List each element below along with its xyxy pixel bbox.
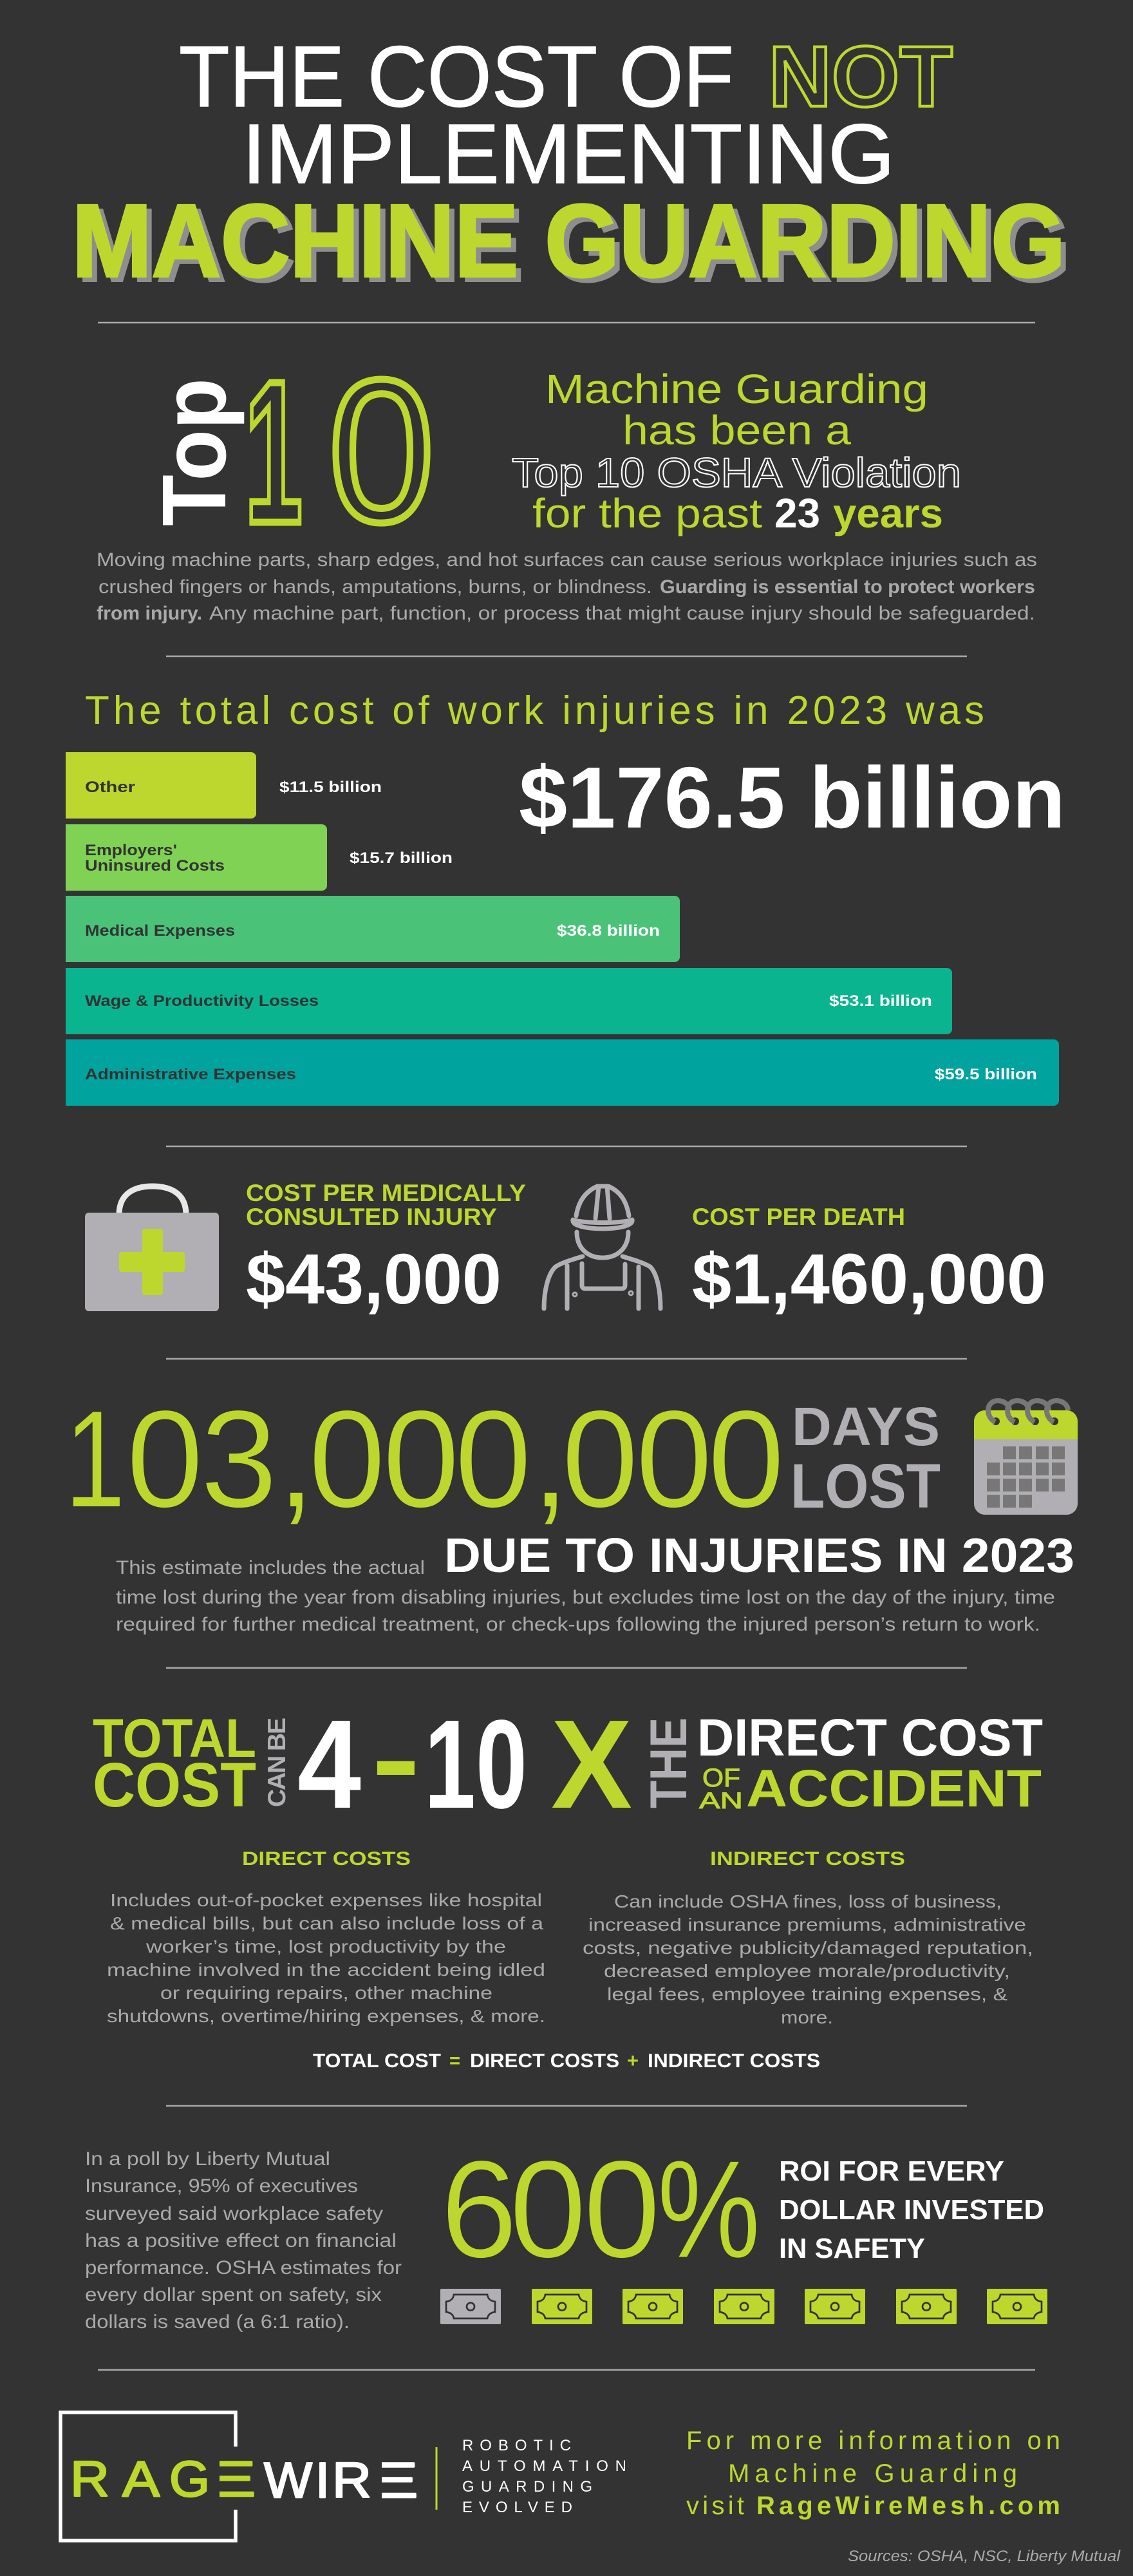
bar: medical expenses: Medical Expenses [85,922,235,940]
formula: total cost: + [627,2049,639,2072]
logo tagline: ROBOTIC [462,2437,571,2454]
headline: total cost multiplier: COST [93,1750,256,1820]
bar: employers uninsured costs: $15.7 billion [350,849,453,867]
bar chart: cost of injuries [66,752,1059,1106]
title: NOT [769,29,953,125]
bar: employers uninsured costs: Employers' [85,842,177,859]
logo tagline: AUTOMATION [462,2458,626,2475]
panel: direct costs: or requiring repairs, other machine [160,1983,492,2003]
stat: cost per medically consulted injury: COST PER MEDICALLY [246,1180,526,1206]
roi label: DOLLAR INVESTED [779,2194,1044,2226]
intro paragraph: crushed fingers or hands, amputations, burns, or blindness. [98,576,652,598]
call to action: Machine Guarding [728,2459,1017,2488]
days lost label: LOST [791,1451,941,1521]
stat: cost per death: $1,460,000 [692,1240,1046,1319]
bar: administrative expenses: $59.5 billion [935,1066,1037,1083]
panel: indirect costs [583,1848,1033,2027]
icon: medical kit [85,1186,219,1311]
panel: direct costs: Includes out-of-pocket expenses like hospital [110,1890,542,1910]
headline: total cost multiplier: TOTAL [93,1708,256,1768]
days lost label [791,1396,941,1521]
stat: cost per medically consulted injury [246,1180,526,1319]
call to action: visit [686,2492,744,2520]
poll paragraph: has a positive effect on financial [85,2230,397,2251]
top 10 graphic: 0 [328,337,435,564]
headline: total cost multiplier: OF [702,1764,740,1792]
panel: direct costs: & medical bills, but can also include loss of a [110,1913,544,1933]
poll paragraph: Insurance, 95% of executives [85,2175,358,2197]
due to injuries heading: DUE TO INJURIES IN 2023 [444,1528,1074,1582]
top 10 statement: 23 [774,490,820,536]
poll paragraph: every dollar spent on safety, six [85,2284,382,2306]
headline: total cost multiplier: - [371,1694,420,1823]
bar: other: Other [85,779,135,796]
icon: construction worker [544,1186,660,1309]
bar: administrative expenses: Administrative Expenses [85,1066,296,1083]
poll paragraph: surveyed said workplace safety [85,2203,383,2224]
days lost explanation: time lost during the year from disabling injuries, but excludes time lost on the day of the injury, time [116,1587,1055,1608]
intro paragraph: Any machine part, function, or process that might cause injury should be safeguarded. [209,603,1035,624]
panel: indirect costs: INDIRECT COSTS [710,1848,905,1870]
formula: total cost: INDIRECT COSTS [648,2049,820,2072]
call to action [686,2427,1060,2520]
headline: total cost multiplier [93,1694,1043,1835]
logo tagline: GUARDING [462,2478,592,2496]
headline: total cost multiplier: DIRECT COST [697,1709,1043,1767]
intro paragraph: from injury. [97,603,202,624]
logo: RageWire: E [205,2450,256,2507]
logo: RageWire: G [169,2450,210,2507]
top 10 statement: years [833,490,943,536]
top 10 statement: for the past [532,490,762,536]
days lost number: 1 [64,1381,126,1537]
panel: indirect costs: legal fees, employee training expenses, & [607,1984,1007,2004]
title: MACHINE GUARDING [77,187,1071,303]
roi label: ROI FOR EVERY [779,2155,1004,2187]
top 10 graphic: 1 [245,339,303,565]
days lost explanation [116,1557,1055,1635]
top 10 statement: has been a [623,407,851,453]
bar: employers uninsured costs [66,824,453,891]
bar: wage and productivity losses: $53.1 billion [829,992,932,1010]
panel: indirect costs: costs, negative publicity/damaged reputation, [583,1938,1033,1958]
headline: total cost multiplier: 4 [297,1694,361,1835]
panel: indirect costs: increased insurance premiums, administrative [588,1915,1026,1935]
bar: administrative expenses [66,1039,1059,1106]
headline: total cost multiplier: 10 [424,1694,527,1835]
top 10 statement: Machine Guarding [545,366,928,412]
title: THE COST OF [179,29,734,125]
headline: total cost multiplier: X [551,1694,632,1835]
sources: Sources: OSHA, NSC, Liberty Mutual [848,2548,1121,2565]
logo: RageWire: W [264,2452,312,2508]
roi label [779,2155,1044,2264]
stat: cost per medically consulted injury: $43,000 [246,1240,501,1319]
intro paragraph: Guarding is essential to protect workers [660,576,1035,598]
formula: total cost: = [449,2049,460,2072]
logo tagline [462,2437,626,2516]
top 10 graphic [143,337,435,565]
title: MACHINE GUARDING [72,183,1065,298]
logo: RageWire [61,2412,436,2541]
panel: direct costs: DIRECT COSTS [242,1848,411,1870]
call to action: RageWireMesh.com [756,2492,1060,2520]
headline: total cost multiplier: ACCIDENT [746,1759,1042,1818]
logo: RageWire: A [122,2450,160,2507]
panel: indirect costs: more. [781,2007,833,2027]
headline: total cost multiplier: CAN BE [263,1718,291,1807]
poll paragraph: In a poll by Liberty Mutual [85,2148,330,2170]
headline: total cost multiplier: THE [640,1718,698,1808]
bar: medical expenses [66,896,680,962]
roi figure: 600 [440,2131,660,2287]
total cost heading: The total cost of work injuries in 2023 was [85,688,984,733]
headline: total cost multiplier: AN [699,1788,743,1814]
panel: indirect costs: Can include OSHA fines, loss of business, [614,1891,1002,1911]
total cost figure: $176.5 billion [519,749,1065,846]
icons: dollar bills [440,2289,1047,2324]
icon: calendar [974,1401,1078,1515]
days lost explanation: This estimate includes the actual [116,1557,425,1578]
call to action: For more information on [686,2427,1060,2455]
bar: other [66,752,382,819]
bar: medical expenses: $36.8 billion [557,922,660,940]
title: IMPLEMENTING [242,106,895,201]
roi figure: % [657,2131,760,2287]
logo: RageWire: E [367,2452,418,2508]
top 10 statement [512,366,961,536]
title [72,29,1071,303]
roi figure [440,2131,760,2287]
bar: other: $11.5 billion [279,779,382,796]
bar: employers uninsured costs: Uninsured Costs [85,857,225,875]
stat: cost per death [692,1204,1046,1319]
bar: wage and productivity losses [66,968,952,1034]
intro paragraph [97,549,1037,624]
panel: direct costs: machine involved in the accident being idled [107,1960,545,1980]
stat: cost per death: COST PER DEATH [692,1204,905,1230]
formula: total cost: TOTAL COST [313,2049,441,2072]
poll paragraph: performance. OSHA estimates for [85,2257,402,2278]
logo: RageWire: I [315,2452,330,2508]
days lost number: 03,000,000 [126,1381,785,1537]
days lost label: DAYS [792,1396,940,1457]
days lost explanation: required for further medical treatment, or check-ups following the injured person’s return to work. [116,1614,1040,1635]
logo: RageWire: R [332,2452,371,2508]
panel: direct costs: worker’s time, lost productivity by the [145,1937,506,1956]
logo: RageWire: R [70,2450,109,2507]
formula: total cost [313,2049,820,2072]
poll paragraph: dollars is saved (a 6:1 ratio). [85,2311,350,2333]
poll paragraph [85,2148,402,2333]
bar: wage and productivity losses: Wage & Productivity Losses [85,992,319,1010]
stat: cost per medically consulted injury: CONSULTED INJURY [246,1204,497,1230]
formula: total cost: DIRECT COSTS [470,2049,619,2072]
top 10 statement: Top 10 OSHA Violation [512,450,961,496]
top 10 graphic: Top [143,378,245,526]
panel: direct costs [107,1848,545,2026]
roi label: IN SAFETY [779,2233,925,2264]
panel: direct costs: shutdowns, overtime/hiring expenses, & more. [107,2006,545,2026]
panel: indirect costs: decreased employee morale/productivity, [604,1961,1010,1981]
intro paragraph: Moving machine parts, sharp edges, and hot surfaces can cause serious workplace injuries such as [97,549,1037,571]
logo tagline: EVOLVED [462,2499,572,2516]
